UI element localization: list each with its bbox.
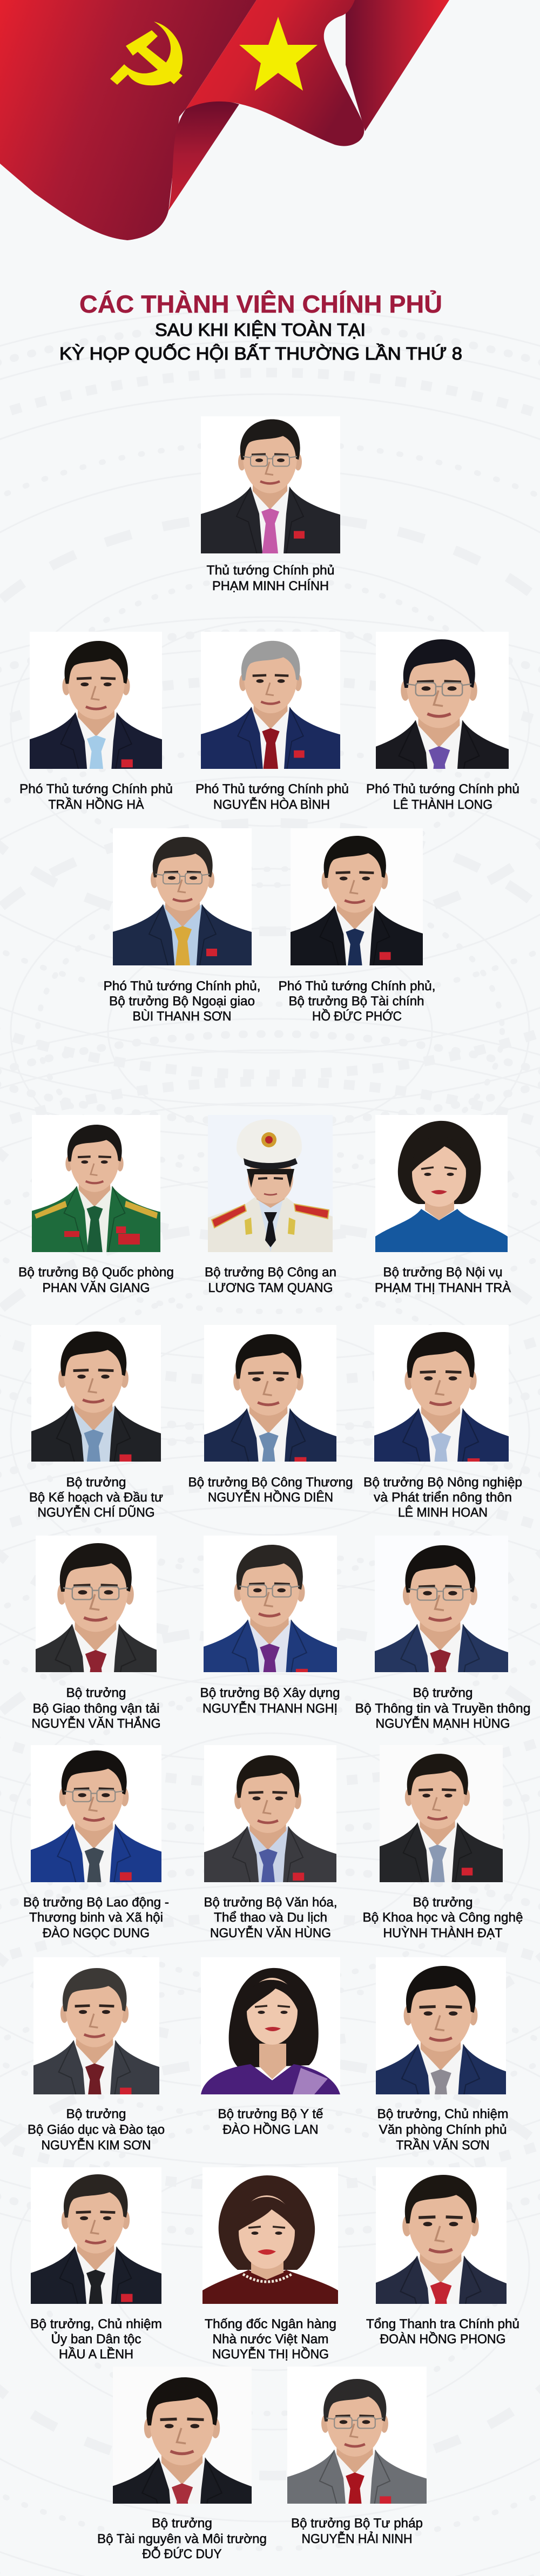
card: Bùi Thanh Sơn xyxy=(64,828,301,1024)
caption: Bộ trưởng Bộ Văn hóa, xyxy=(204,1895,337,1910)
caption xyxy=(363,1475,522,1520)
caption: Bộ trưởng Bộ Nông nghiệp xyxy=(363,1475,522,1490)
caption xyxy=(31,1686,161,1731)
caption: Ủy ban Dân tộc xyxy=(51,2331,141,2347)
caption: Bộ trưởng xyxy=(66,1475,126,1490)
photo: Nguyễn Thị Hồng xyxy=(202,2167,338,2304)
caption: NGUYỄN KIM SƠN xyxy=(41,2138,151,2153)
photo: Nguyễn Thanh Nghị xyxy=(204,1536,337,1672)
card: Lê Minh Hoan xyxy=(306,1325,540,1520)
caption: ĐÀO NGỌC DUNG xyxy=(43,1926,150,1941)
card: Hầu A Lềnh xyxy=(0,2167,222,2362)
caption: Thương binh và Xã hội xyxy=(29,1910,163,1925)
card: Trần Hồng Hà xyxy=(0,632,222,812)
caption: Bộ trưởng, Chủ nhiệm xyxy=(377,2107,509,2121)
caption: NGUYỄN VĂN THẮNG xyxy=(31,1716,161,1731)
caption xyxy=(206,563,335,593)
card: Nguyễn Mạnh Hùng xyxy=(301,1536,540,1732)
caption: Bộ trưởng xyxy=(66,2107,126,2121)
caption xyxy=(18,1265,174,1295)
caption: Bộ trưởng Bộ Nội vụ xyxy=(383,1265,502,1280)
photo: Nguyễn Văn Hùng xyxy=(204,1745,336,1882)
caption: HỒ ĐỨC PHỚC xyxy=(312,1009,402,1024)
caption xyxy=(375,1265,511,1295)
caption: ĐOÀN HỒNG PHONG xyxy=(380,2331,505,2347)
card: Huỳnh Thành Đạt xyxy=(316,1745,540,1941)
heading line 2: SAU KHI KIỆN TOÀN TẠI xyxy=(155,320,366,340)
caption: ĐỖ ĐỨC DUY xyxy=(143,2546,221,2561)
caption xyxy=(29,1475,163,1520)
caption: Nhà nước Việt Nam xyxy=(213,2332,328,2347)
card: Nguyễn Hòa Bình xyxy=(154,632,387,812)
caption xyxy=(279,979,435,1024)
caption: Bộ trưởng xyxy=(66,1686,126,1700)
caption xyxy=(377,2107,509,2153)
caption: NGUYỄN VĂN HÙNG xyxy=(210,1925,331,1941)
photo: Nguyễn Hải Ninh xyxy=(287,2367,427,2504)
photo: Nguyễn Văn Thắng xyxy=(36,1536,157,1672)
photo: Đào Hồng Lan xyxy=(201,1957,340,2094)
photo: Bùi Thanh Sơn xyxy=(113,828,252,965)
caption: Bộ Thông tin và Truyền thông xyxy=(355,1701,530,1716)
caption: LÊ THÀNH LONG xyxy=(393,797,492,812)
photo: Đỗ Đức Duy xyxy=(113,2367,252,2504)
caption: Bộ trưởng Bộ Xây dựng xyxy=(200,1686,340,1700)
caption: HUỲNH THÀNH ĐẠT xyxy=(383,1926,503,1941)
card: Nguyễn Thị Hồng xyxy=(202,2167,338,2362)
caption xyxy=(355,1686,530,1731)
photo: Nguyễn Mạnh Hùng xyxy=(375,1536,508,1672)
caption: Phó Thủ tướng Chính phủ xyxy=(19,782,173,796)
photo: Phạm Minh Chính xyxy=(201,416,340,553)
card: Nguyễn Kim Sơn xyxy=(0,1957,221,2153)
caption: HẦU A LỀNH xyxy=(59,2347,133,2362)
caption: Phó Thủ tướng Chính phủ xyxy=(366,782,519,796)
caption: Bộ trưởng Bộ Lao động - xyxy=(23,1895,169,1910)
heading main: CÁC THÀNH VIÊN CHÍNH PHỦ xyxy=(79,290,442,318)
caption: Bộ trưởng xyxy=(413,1686,473,1700)
photo: Trần Văn Sơn xyxy=(376,1957,506,2094)
card: Trần Văn Sơn xyxy=(303,1957,540,2153)
card: Nguyễn Hải Ninh xyxy=(230,2367,480,2546)
photo: Lương Tam Quang xyxy=(208,1119,333,1252)
card: Đào Ngọc Dung xyxy=(0,1745,224,1941)
caption: TRẦN VĂN SƠN xyxy=(396,2138,489,2153)
card: Nguyễn Văn Hùng xyxy=(143,1745,393,1941)
caption xyxy=(195,782,349,812)
caption: NGUYỄN HẢI NINH xyxy=(301,2531,413,2546)
caption: ĐÀO HỒNG LAN xyxy=(222,2122,319,2137)
caption xyxy=(30,2317,162,2362)
photo: Đoàn Hồng Phong xyxy=(376,2167,507,2304)
card: Phạm Minh Chính xyxy=(151,416,389,593)
caption: Bộ trưởng Bộ Ngoại giao xyxy=(109,994,255,1009)
photo: Lê Thành Long xyxy=(376,632,509,769)
caption xyxy=(204,1895,337,1941)
caption: Bộ trưởng Bộ Tài chính xyxy=(288,994,424,1009)
heading line 3: KỲ HỌP QUỐC HỘI BẤT THƯỜNG LẦN THỨ 8 xyxy=(59,343,462,363)
photo: Đào Ngọc Dung xyxy=(31,1745,161,1882)
caption: Phó Thủ tướng Chính phủ, xyxy=(279,979,435,993)
caption xyxy=(291,2516,423,2546)
caption: Bộ trưởng Bộ Công Thương xyxy=(188,1475,353,1490)
caption xyxy=(366,2317,519,2347)
caption: NGUYỄN THANH NGHỊ xyxy=(202,1701,338,1716)
caption: Thống đốc Ngân hàng xyxy=(205,2317,336,2331)
caption: Phó Thủ tướng Chính phủ xyxy=(195,782,349,796)
caption: Văn phòng Chính phủ xyxy=(379,2122,507,2137)
caption xyxy=(366,782,519,812)
photo: Hồ Đức Phớc xyxy=(291,828,423,965)
title xyxy=(59,290,462,363)
caption xyxy=(205,2317,336,2362)
caption: Bộ Tài nguyên và Môi trường xyxy=(97,2532,267,2546)
photo: Hầu A Lềnh xyxy=(31,2167,161,2304)
caption: Bộ Kế hoạch và Đầu tư xyxy=(29,1490,163,1505)
caption: Bộ trưởng Bộ Công an xyxy=(205,1265,336,1280)
photo: Nguyễn Hồng Diên xyxy=(204,1325,336,1462)
caption: NGUYỄN HỒNG DIÊN xyxy=(208,1490,333,1505)
caption: Bộ trưởng Bộ Y tế xyxy=(218,2107,323,2121)
caption: Bộ trưởng xyxy=(152,2516,212,2531)
flag banner xyxy=(0,0,449,240)
caption xyxy=(188,1475,353,1505)
card: Phạm Thị Thanh Trà xyxy=(375,1115,511,1295)
caption: NGUYỄN CHÍ DŨNG xyxy=(38,1505,154,1520)
caption: Bộ trưởng, Chủ nhiệm xyxy=(30,2317,162,2331)
caption: Bộ trưởng xyxy=(413,1895,473,1910)
photo: Phan Văn Giang xyxy=(32,1115,160,1252)
photo: Lê Minh Hoan xyxy=(374,1325,509,1462)
caption: Bộ Giáo dục và Đào tạo xyxy=(28,2122,165,2137)
caption: Bộ Khoa học và Công nghệ xyxy=(363,1910,523,1925)
caption xyxy=(19,782,173,812)
caption xyxy=(97,2516,267,2561)
caption xyxy=(218,2107,323,2137)
caption: TRẦN HỒNG HÀ xyxy=(49,797,144,812)
caption: NGUYỄN THỊ HỒNG xyxy=(212,2347,329,2362)
card: Đoàn Hồng Phong xyxy=(298,2167,540,2366)
caption: NGUYỄN MẠNH HÙNG xyxy=(376,1716,510,1731)
caption xyxy=(200,1686,340,1716)
caption xyxy=(205,1265,336,1295)
icon: hammer and sickle xyxy=(110,22,183,85)
card: Phan Văn Giang xyxy=(0,1115,202,1295)
caption: Bộ Giao thông vận tải xyxy=(32,1701,160,1716)
caption: BÙI THANH SƠN xyxy=(133,1009,231,1024)
caption: Thủ tướng Chính phủ xyxy=(206,563,335,578)
icon: star xyxy=(239,17,318,91)
card: Nguyễn Thanh Nghị xyxy=(138,1536,401,1721)
card: Nguyễn Chí Dũng xyxy=(0,1325,224,1520)
caption: PHAN VĂN GIANG xyxy=(42,1281,150,1295)
photo: Nguyễn Kim Sơn xyxy=(33,1957,159,2094)
caption: PHẠM MINH CHÍNH xyxy=(212,579,329,593)
photo: Phạm Thị Thanh Trà xyxy=(375,1115,508,1252)
photo: Nguyễn Hòa Bình xyxy=(201,632,340,769)
caption: và Phát triển nông thôn xyxy=(374,1490,512,1505)
caption: Bộ trưởng Bộ Quốc phòng xyxy=(18,1265,174,1280)
caption xyxy=(363,1895,523,1941)
card: Hồ Đức Phớc xyxy=(231,828,478,1024)
card: Đỗ Đức Duy xyxy=(40,2367,323,2567)
card: Nguyễn Văn Thắng xyxy=(0,1536,238,1734)
card: Nguyễn Hồng Diên xyxy=(138,1325,399,1510)
card: Đào Hồng Lan xyxy=(201,1957,340,2137)
photo: Nguyễn Chí Dũng xyxy=(31,1325,161,1462)
photo: Huỳnh Thành Đạt xyxy=(380,1745,503,1882)
caption: PHẠM THỊ THANH TRÀ xyxy=(375,1281,511,1295)
caption: Tổng Thanh tra Chính phủ xyxy=(366,2317,519,2331)
caption: LƯƠNG TAM QUANG xyxy=(208,1281,333,1295)
card: Lê Thành Long xyxy=(296,632,540,830)
caption: LÊ MINH HOAN xyxy=(398,1505,488,1520)
caption: Phó Thủ tướng Chính phủ, xyxy=(104,979,260,993)
caption xyxy=(23,1895,169,1941)
caption: Bộ trưởng Bộ Tư pháp xyxy=(291,2516,423,2531)
caption: NGUYỄN HÒA BÌNH xyxy=(213,797,330,812)
caption xyxy=(104,979,260,1024)
card: Lương Tam Quang xyxy=(205,1115,336,1295)
caption xyxy=(28,2107,165,2153)
photo: Trần Hồng Hà xyxy=(30,632,162,769)
caption: Thể thao và Du lịch xyxy=(214,1910,327,1925)
